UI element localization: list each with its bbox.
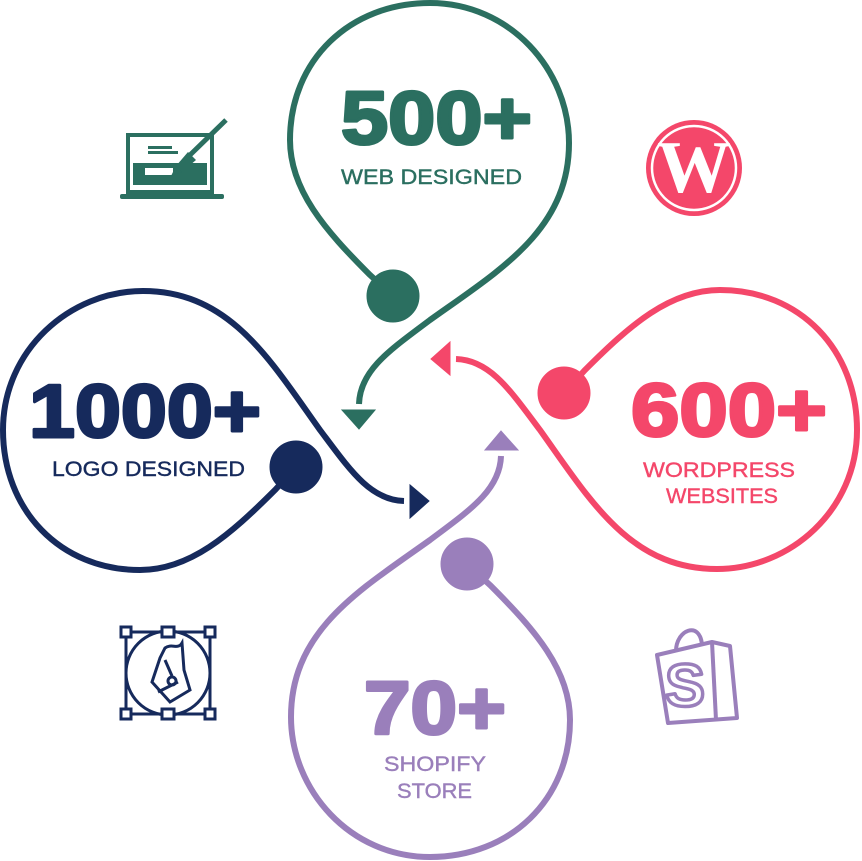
- stat: 600+ wordpress websites: WEBSITES: [666, 485, 778, 508]
- icon: shopify bag: [657, 630, 737, 723]
- stat: 1000+ logo designed: [29, 369, 261, 481]
- stat: 70+ shopify store: [364, 666, 506, 803]
- stat: 600+ wordpress websites: 600+: [631, 368, 827, 452]
- loop: wordpress websites (pink): [431, 290, 857, 569]
- loop: logo designed (navy): [3, 291, 429, 570]
- stat: 70+ shopify store: SHOPIFY: [384, 753, 486, 776]
- loop: shopify store (purple): [291, 431, 570, 857]
- icon: laptop with pen: [120, 120, 226, 199]
- stat: 1000+ logo designed: LOGO DESIGNED: [52, 458, 245, 481]
- loop: web designed (green): [290, 3, 569, 429]
- icon: wordpress: W: [657, 127, 731, 209]
- icon: pen tool logo: [121, 627, 215, 719]
- stat: 1000+ logo designed: 1000+: [29, 369, 261, 453]
- stat: 500+ web designed: WEB DESIGNED: [341, 166, 522, 189]
- stat: 70+ shopify store: 70+: [364, 666, 506, 750]
- icon: shopify bag: S: [665, 652, 705, 719]
- stat: 600+ wordpress websites: WORDPRESS: [643, 459, 795, 482]
- stat: 600+ wordpress websites: [631, 368, 827, 508]
- stat: 70+ shopify store: STORE: [397, 780, 472, 803]
- stat: 500+ web designed: 500+: [341, 76, 532, 160]
- stat: 500+ web designed: [341, 76, 532, 189]
- icon: wordpress: [646, 120, 742, 216]
